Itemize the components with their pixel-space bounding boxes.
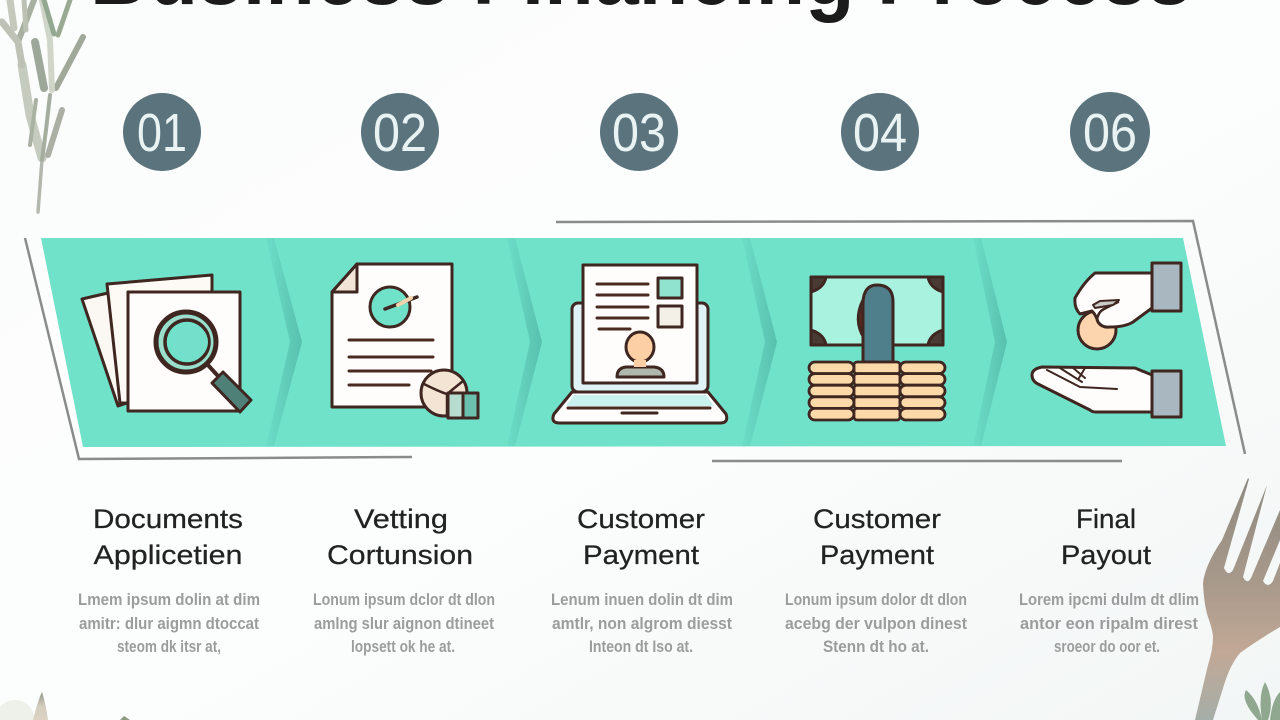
step 1 description — [78, 590, 260, 656]
step 1 text — [78, 504, 260, 656]
icon: documents with magnifier — [82, 275, 251, 412]
icon: laptop with profile document — [553, 265, 727, 423]
step 2 text — [313, 504, 495, 656]
step numbers — [123, 92, 1150, 172]
icon: banknote and coin stacks — [809, 277, 945, 420]
step 1 description: Lmem ipsum dolin at dim — [78, 590, 260, 609]
step 5 description: sroeor do oor et. — [1054, 637, 1160, 656]
number badge 04 — [841, 93, 919, 171]
step 1 description: amitr: dlur aigmn dtoccat — [79, 614, 259, 633]
coin stack grid — [809, 362, 945, 420]
step 5 heading: Payout — [1061, 540, 1152, 570]
step 4 heading: Payment — [820, 540, 935, 570]
step 2 description — [313, 590, 495, 656]
step 4 description: Lonum ipsum dolor dt dlon — [785, 590, 967, 609]
step 5 description — [1019, 590, 1199, 656]
step 4 description: acebg der vulpon dinest — [785, 614, 967, 633]
step 4 heading — [813, 504, 941, 570]
step 3 description — [551, 590, 733, 656]
step 4 description: Stenn dt ho at. — [823, 637, 929, 656]
number badge 04: 04 — [853, 103, 907, 163]
step 3 heading: Payment — [583, 540, 700, 570]
step 5 heading: Final — [1076, 504, 1136, 534]
decoration: fork bottom right — [1195, 478, 1280, 720]
step 4 text — [785, 504, 967, 656]
icon: signed document with globe and books — [332, 264, 478, 418]
step 5 heading — [1061, 504, 1152, 570]
step 3 heading — [577, 504, 705, 570]
number badge 03 — [600, 93, 678, 171]
decoration: rosemary sprig top left — [2, 0, 83, 212]
step 1 heading: Documents — [93, 504, 243, 534]
decoration: leaves bottom left — [0, 692, 130, 720]
step 2 heading: Vetting — [354, 504, 448, 534]
number badge 02 — [361, 93, 439, 171]
step 3 text — [551, 504, 733, 656]
step 5 description: antor eon ripalm direst — [1020, 614, 1198, 633]
grey frame lines around band — [25, 221, 1245, 461]
step 2 description: Lonum ipsum dclor dt dlon — [313, 590, 495, 609]
step 1 heading: Applicetien — [94, 540, 242, 570]
step 5 description: Lorem ipcmi dulm dt dlim — [1019, 590, 1199, 609]
step 2 heading: Cortunsion — [327, 540, 473, 570]
step 5 text — [1019, 504, 1199, 656]
step 1 heading — [93, 504, 243, 570]
step 3 description: Inteon dt Iso at. — [589, 637, 693, 656]
step 3 heading: Customer — [577, 504, 705, 534]
decoration: herb leaves bottom right — [1244, 682, 1280, 720]
step 3 description: amtlr, non algrom diesst — [552, 614, 732, 633]
number badge 03: 03 — [612, 103, 666, 163]
step 4 description — [785, 590, 967, 656]
icon: hands passing a coin — [1032, 263, 1181, 417]
step 4 heading: Customer — [813, 504, 941, 534]
number badge 02: 02 — [373, 103, 427, 163]
step 2 description: amlng slur aignon dtineet — [314, 614, 494, 633]
number badge 01 — [123, 93, 201, 171]
process band with chevrons — [41, 238, 1226, 447]
step 2 description: lopsett ok he at. — [351, 637, 455, 656]
number badge 06 — [1070, 92, 1150, 172]
step 1 description: steom dk itsr at, — [117, 637, 221, 656]
step 3 description: Lenum inuen dolin dt dim — [551, 590, 733, 609]
number badge 06: 06 — [1083, 103, 1137, 163]
number badge 01: 01 — [137, 103, 187, 163]
step 2 heading — [327, 504, 473, 570]
